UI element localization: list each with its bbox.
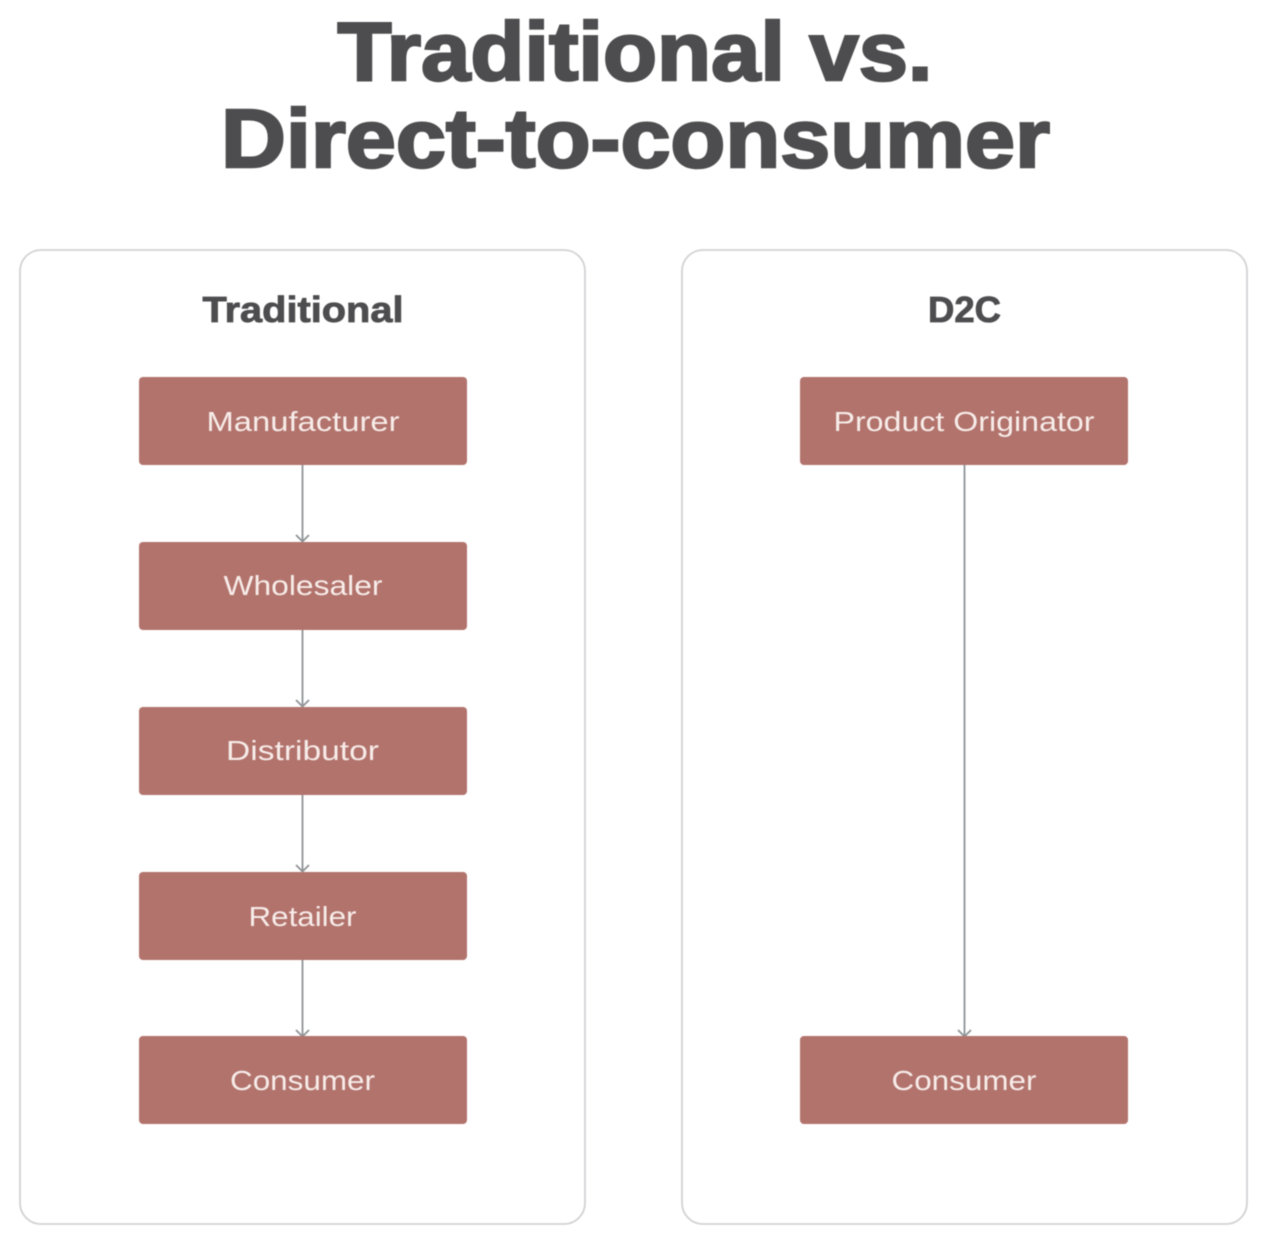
title: Traditional vs. — [338, 5, 932, 98]
panel: traditional — [20, 250, 585, 1224]
arrow: retailer to consumer — [296, 960, 309, 1036]
box: manufacturer — [139, 377, 467, 465]
box: retailer: Retailer — [248, 901, 356, 932]
panel: d2c — [682, 250, 1247, 1224]
box: consumer — [139, 1036, 467, 1124]
box: wholesaler: Wholesaler — [224, 570, 382, 601]
box: retailer — [139, 872, 467, 960]
heading: d2c: D2C — [928, 289, 1001, 330]
title — [221, 5, 1050, 185]
box: wholesaler — [139, 542, 467, 630]
box: product originator — [800, 377, 1128, 465]
arrow: distributor to retailer — [296, 795, 309, 872]
heading: traditional: Traditional — [202, 289, 404, 330]
box: product originator: Product Originator — [834, 406, 1094, 437]
box: d2c consumer — [800, 1036, 1128, 1124]
box: distributor — [139, 707, 467, 795]
arrow: wholesaler to distributor — [296, 630, 309, 706]
title: Direct-to-consumer — [221, 92, 1050, 185]
box: consumer: Consumer — [230, 1065, 375, 1096]
box: manufacturer: Manufacturer — [206, 406, 400, 437]
arrow: originator to consumer — [958, 465, 971, 1036]
arrow: manufacturer to wholesaler — [296, 465, 309, 542]
box: d2c consumer: Consumer — [892, 1065, 1036, 1096]
box: distributor: Distributor — [226, 735, 379, 766]
